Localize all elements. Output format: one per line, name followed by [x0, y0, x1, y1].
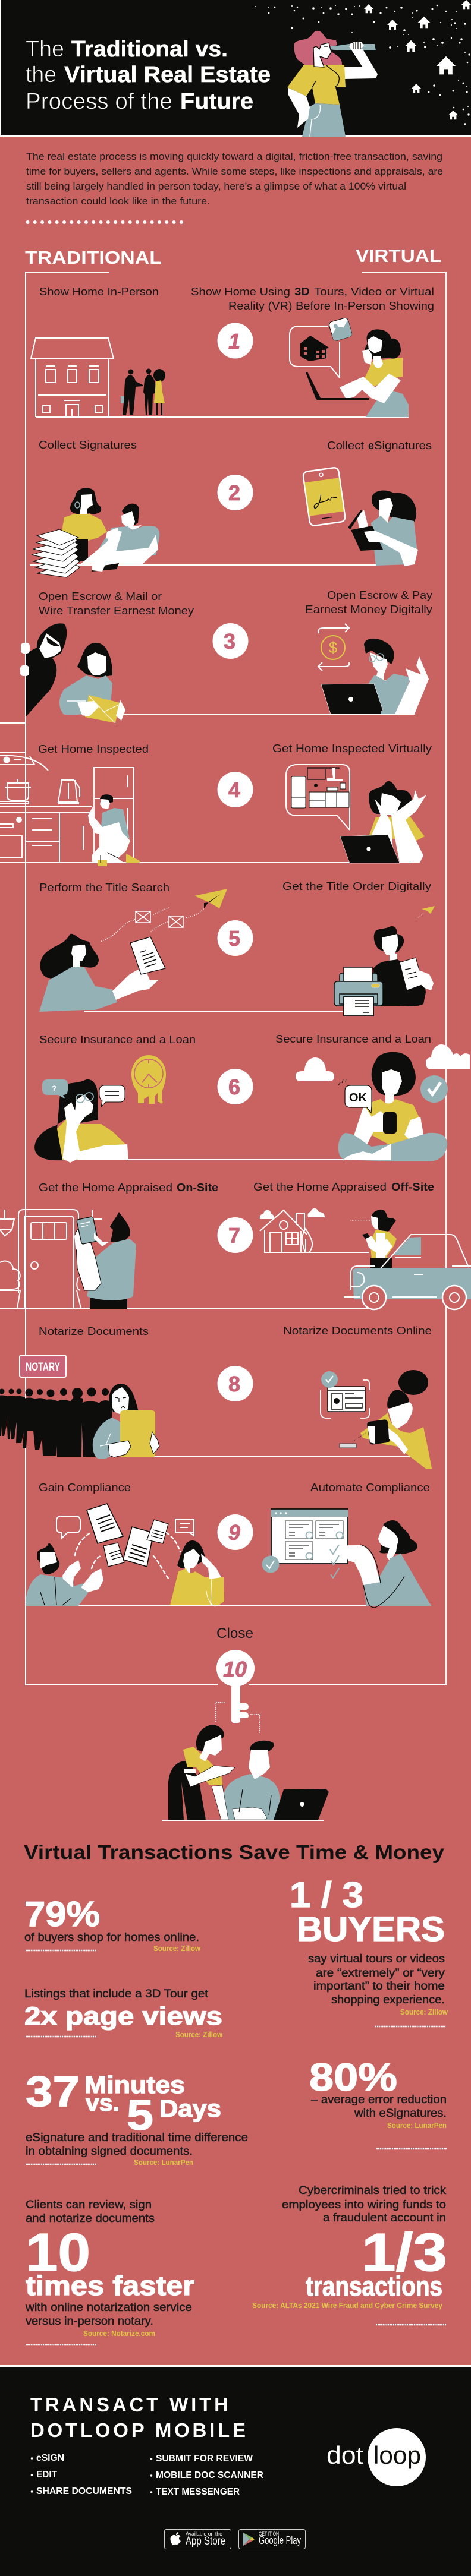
- illustration: house and clouds line art: [260, 1208, 369, 1252]
- stat: 2x page views: Source: Zillow: [175, 2031, 222, 2039]
- stat: 10 times faster: Clients can review, sign: [26, 2198, 152, 2211]
- stat: 79 percent: Source: Zillow: [153, 1944, 200, 1953]
- stat: 80 percent: 80%: [309, 2055, 397, 2099]
- step number 3: 3: [224, 629, 236, 654]
- stat: one third of transactions: Source: ALTAs 2021 Wire Fraud and Cyber Crime Survey: [252, 2302, 442, 2310]
- title: the: [26, 62, 56, 87]
- title: Traditional vs.: [71, 37, 228, 62]
- stat: one third of buyers: [290, 1875, 448, 2026]
- feature list: EDIT: [36, 2470, 57, 2480]
- illustration: worried woman: [170, 1540, 224, 1606]
- starry sky with houses: [255, 0, 471, 125]
- title: Virtual Real Estate: [64, 62, 271, 87]
- illustration: car: [344, 1235, 471, 1309]
- step number 5: [218, 920, 253, 956]
- stat: 2x page views: 2x page views: [24, 2002, 222, 2031]
- step 8: [0, 1324, 432, 1469]
- step number 9: 9: [228, 1520, 240, 1545]
- step number 9: [218, 1514, 253, 1550]
- label: automate compliance: Automate Compliance: [310, 1481, 430, 1494]
- stat: one third of transactions: [252, 2184, 447, 2325]
- google play badge: Google Play: [259, 2534, 301, 2546]
- label: close: Close: [216, 1625, 253, 1641]
- floor line: [84, 1011, 343, 1012]
- step number 7: [218, 1217, 253, 1253]
- illustration: compliance browser window: [262, 1509, 348, 1578]
- label: get the home appraised on-site: [39, 1181, 218, 1194]
- key with number 10: 10: [223, 1657, 247, 1681]
- stat: 79 percent: of buyers shop for homes online.: [24, 1931, 199, 1944]
- label: collect esignatures: e: [368, 439, 374, 452]
- illustration: house line art: [31, 338, 114, 417]
- illustration: melting clock: [131, 1055, 166, 1104]
- stat: 2x page views: Listings that include a 3D Tour get: [24, 1987, 209, 2000]
- illustration: woman amazed at laptop: [340, 781, 426, 863]
- stat: 80 percent: [309, 2055, 447, 2149]
- label: get the home appraised off-site: Off-Site: [391, 1180, 434, 1193]
- step 2: [30, 438, 432, 577]
- floor line: [26, 1605, 431, 1606]
- dotloop logo: [326, 2428, 426, 2486]
- heading: virtual: VIRTUAL: [356, 245, 441, 266]
- woman looking through telescope: [287, 31, 378, 137]
- label: open escrow and mail: Open Escrow & Mail or: [39, 590, 162, 602]
- illustration: worried woman on phone: ?: [52, 1084, 56, 1093]
- illustration: woman, man and paper stack: [32, 488, 159, 577]
- label: get the home appraised off-site: Get the Home Appraised: [253, 1180, 387, 1193]
- feature list: MOBILE DOC SCANNER: [156, 2470, 263, 2480]
- label: show home in-person: Show Home In-Person: [39, 285, 159, 298]
- feature list: SUBMIT FOR REVIEW: [156, 2454, 253, 2464]
- app store badge: [164, 2530, 231, 2549]
- label: get the home appraised off-site: [253, 1180, 434, 1193]
- label: open escrow and pay digitally: Earnest Money Digitally: [305, 603, 433, 615]
- step number 4: [218, 772, 253, 807]
- floor line: [122, 714, 415, 715]
- step number 5: 5: [228, 926, 240, 951]
- floor line: [128, 1159, 344, 1160]
- stat: one third of buyers: 1 / 3: [290, 1875, 363, 1915]
- stat: 37 minutes vs 5 days: eSignature and traditional time difference: [26, 2131, 248, 2144]
- illustration: speech bubble with house: [290, 317, 353, 378]
- stat: 10 times faster: [25, 2198, 194, 2345]
- intro paragraph: transaction could look like in the future.: [26, 195, 210, 207]
- stat: one third of buyers: BUYERS: [297, 1910, 445, 1949]
- stat: one third of buyers: are “extremely” or “very: [316, 1966, 445, 1980]
- label: secure insurance and a loan (traditional): Secure Insurance and a Loan: [39, 1033, 196, 1046]
- illustration: man with laptop: [321, 639, 429, 714]
- illustration: front door line art: [0, 1210, 102, 1309]
- illustration: worried woman on phone: [34, 1079, 128, 1163]
- stat: 37 minutes vs 5 days: Source: LunarPen: [134, 2158, 193, 2167]
- illustration: woman with envelope: [59, 643, 125, 723]
- step 5: [39, 880, 435, 1016]
- footer panel: [0, 2365, 471, 2576]
- label: notarize documents online: Notarize Documents Online: [283, 1324, 432, 1337]
- illustration: phone with esignature: [303, 467, 346, 526]
- illustration: man at printer: [334, 926, 434, 1016]
- stat: 79 percent: 79%: [24, 1895, 100, 1934]
- step number 6: 6: [228, 1075, 240, 1099]
- stat: 37 minutes vs 5 days: [26, 2068, 248, 2167]
- google play badge: GET IT ON: [259, 2531, 279, 2537]
- stat: one third of transactions: transactions: [306, 2271, 442, 2302]
- illustration: kitchen line art: [0, 723, 134, 863]
- illustration: man photographing with tablet: [74, 1212, 136, 1309]
- stat: one third of transactions: a fraudulent account in: [323, 2211, 446, 2224]
- illustration: woman scanning with phone: [340, 1370, 432, 1469]
- illustration: woman signing on tablet: [348, 491, 418, 566]
- footer heading: TRANSACT WITH: [30, 2394, 228, 2416]
- label: notarize documents: Notarize Documents: [39, 1325, 149, 1337]
- illustration: people shaking hands: [121, 368, 165, 415]
- floor line: [0, 862, 410, 863]
- dotloop logo: dot: [326, 2441, 363, 2469]
- stat: 10 times faster: times faster: [26, 2270, 194, 2301]
- title: Future: [180, 89, 253, 114]
- label: show home using 3D tours: 3D: [294, 285, 310, 298]
- stat: one third of buyers: Source: Zillow: [400, 2008, 448, 2016]
- illustration: woman at laptop: [306, 329, 409, 417]
- illustration: woman holding document: [39, 934, 165, 1012]
- illustration: kitchen speech bubble: [286, 765, 350, 830]
- label: show home using 3D tours: Reality (VR) Before In-Person Showing: [228, 299, 434, 312]
- illustration: paper plane with envelopes: [100, 889, 227, 942]
- step 3: [20, 589, 433, 723]
- label: collect esignatures: Collect: [327, 439, 364, 452]
- stat: 80 percent: – average error reduction: [311, 2093, 447, 2106]
- title: Process of the: [26, 89, 172, 114]
- footer heading: DOTLOOP MOBILE: [30, 2419, 246, 2441]
- header banner: [0, 0, 471, 137]
- illustration: woman with folder: [93, 1384, 159, 1459]
- step 6: [34, 1033, 470, 1163]
- step 10: close: [162, 1625, 329, 1821]
- icon: check badge: [420, 1075, 448, 1103]
- key with number 10: [216, 1650, 255, 1723]
- step number 2: [218, 475, 253, 510]
- dotted connectors: [216, 1703, 260, 1733]
- illustration: money transfer arrows: $: [329, 639, 338, 656]
- illustration: money transfer arrows: [318, 624, 349, 671]
- step 4: [0, 723, 432, 866]
- heading: traditional: TRADITIONAL: [25, 247, 162, 268]
- illustration: woman with tablet: [351, 1210, 397, 1268]
- footer heading: [30, 2394, 246, 2441]
- app store badge: Available on the: [186, 2531, 222, 2537]
- label: collect esignatures: [327, 439, 432, 452]
- label: collect signatures: Collect Signatures: [39, 438, 137, 451]
- feature list: eSIGN: [36, 2453, 64, 2463]
- stat: 10 times faster: Source: Notarize.com: [83, 2329, 155, 2338]
- label: get the home appraised on-site: Get the Home Appraised: [39, 1181, 172, 1194]
- label: get the title order digitally: Get the Title Order Digitally: [282, 880, 432, 892]
- label: get home inspected virtually: Get Home Inspected Virtually: [272, 742, 432, 755]
- floor line: [0, 1308, 369, 1309]
- title: [26, 37, 271, 114]
- label: collect esignatures: Signatures: [374, 439, 432, 452]
- illustration: couple at laptop: [162, 1725, 329, 1821]
- intro paragraph: The real estate process is moving quickly toward a digital, friction-free transaction, saving: [26, 151, 442, 162]
- label: get home inspected: Get Home Inspected: [38, 743, 149, 755]
- stat: one third of buyers: important” to their home: [313, 1980, 445, 1993]
- stat: 37 minutes vs 5 days: vs.: [86, 2090, 120, 2116]
- stat: one third of transactions: employees into wiring funds to: [282, 2198, 446, 2211]
- stat: one third of transactions: Cybercriminals tried to trick: [299, 2184, 446, 2197]
- stat: 10 times faster: and notarize documents: [26, 2212, 155, 2225]
- step 7: [0, 1180, 471, 1309]
- step number 4: 4: [228, 778, 240, 802]
- illustration: woman with phone and ok bubble: [338, 1052, 447, 1161]
- illustration: woman holding window: [341, 1520, 431, 1608]
- stat: 37 minutes vs 5 days: in obtaining signed documents.: [26, 2145, 193, 2158]
- illustration: clouds: [296, 1044, 470, 1081]
- stat: one third of buyers: shopping experience.: [331, 1993, 445, 2006]
- step number 1: 1: [228, 329, 240, 353]
- illustration: id verification: [321, 1371, 369, 1418]
- stat: 10 times faster: 10: [26, 2223, 90, 2283]
- app store badge: App Store: [186, 2535, 225, 2547]
- dotloop logo: loop: [373, 2441, 421, 2469]
- stat: 80 percent: with eSignatures.: [354, 2107, 447, 2120]
- stat: 79 percent: [24, 1895, 200, 1953]
- notary sign: NOTARY: [26, 1361, 60, 1374]
- illustration: thief peeking: [20, 623, 67, 717]
- step number 8: [218, 1366, 253, 1401]
- stat: 10 times faster: with online notarization service: [25, 2301, 192, 2314]
- feature list: SHARE DOCUMENTS: [36, 2486, 132, 2496]
- step number 8: 8: [228, 1372, 240, 1396]
- label: get the home appraised on-site: On-Site: [177, 1181, 218, 1194]
- stat: 37 minutes vs 5 days: 37: [26, 2068, 80, 2116]
- illustration: kneeling inspector: [88, 794, 140, 866]
- label: open escrow and mail: [39, 590, 194, 617]
- label: gain compliance: Gain Compliance: [39, 1481, 131, 1494]
- feature list: TEXT MESSENGER: [156, 2487, 240, 2497]
- label: open escrow and mail: Wire Transfer Earnest Money: [39, 604, 194, 617]
- title: The: [26, 37, 64, 62]
- stat: 37 minutes vs 5 days: Days: [159, 2095, 221, 2122]
- stat: 37 minutes vs 5 days: Minutes: [84, 2071, 185, 2098]
- illustration: man gesturing: [26, 1543, 103, 1606]
- label: show home using 3D tours: Show Home Using: [191, 285, 290, 298]
- illustration: small paper plane: [415, 906, 435, 918]
- label: show home using 3D tours: Tours, Video or Virtual: [314, 285, 434, 298]
- intro paragraph: [26, 151, 443, 207]
- stat: 10 times faster: versus in-person notary.: [26, 2315, 153, 2328]
- illustration: queue of people: [0, 1388, 113, 1457]
- stat: one third of buyers: say virtual tours or videos: [308, 1952, 445, 1965]
- label: open escrow and pay digitally: Open Escrow & Pay: [327, 589, 433, 601]
- floor line: [154, 1456, 410, 1457]
- step number 7: 7: [228, 1223, 240, 1248]
- stat: 2x page views: [24, 1987, 222, 2039]
- step 1: [31, 285, 434, 417]
- step number 3: [213, 623, 249, 659]
- step number 6: [218, 1069, 253, 1104]
- stat: one third of transactions: 1/3: [362, 2223, 447, 2283]
- label: secure insurance and a loan (virtual): Secure Insurance and a Loan: [275, 1033, 431, 1045]
- step number 2: 2: [228, 481, 240, 505]
- floor line: [36, 416, 409, 418]
- intro paragraph: still being largely handled in person today, here's a glimpse of what a 100% virtual: [26, 181, 406, 192]
- step 9: [26, 1481, 431, 1608]
- label: show home using 3D tours: [191, 285, 434, 312]
- notary sign: [20, 1355, 66, 1377]
- stat: 37 minutes vs 5 days: 5: [127, 2092, 153, 2139]
- illustration: flying documents: [56, 1504, 194, 1579]
- label: perform the title search: Perform the Title Search: [39, 881, 169, 894]
- feature list: [31, 2453, 263, 2497]
- step number 1: [218, 323, 253, 359]
- illustration: woman with phone and ok bubble: OK: [349, 1091, 368, 1104]
- stat: 80 percent: Source: LunarPen: [387, 2122, 447, 2130]
- label: open escrow and pay digitally: [305, 589, 433, 615]
- section heading: virtual transactions save time and money: Virtual Transactions Save Time & Money: [24, 1841, 445, 1863]
- floor line: [30, 564, 376, 566]
- intro paragraph: time for buyers, sellers and agents. While some steps, like inspections and appraisals, are: [26, 166, 443, 177]
- google play badge: [239, 2530, 306, 2549]
